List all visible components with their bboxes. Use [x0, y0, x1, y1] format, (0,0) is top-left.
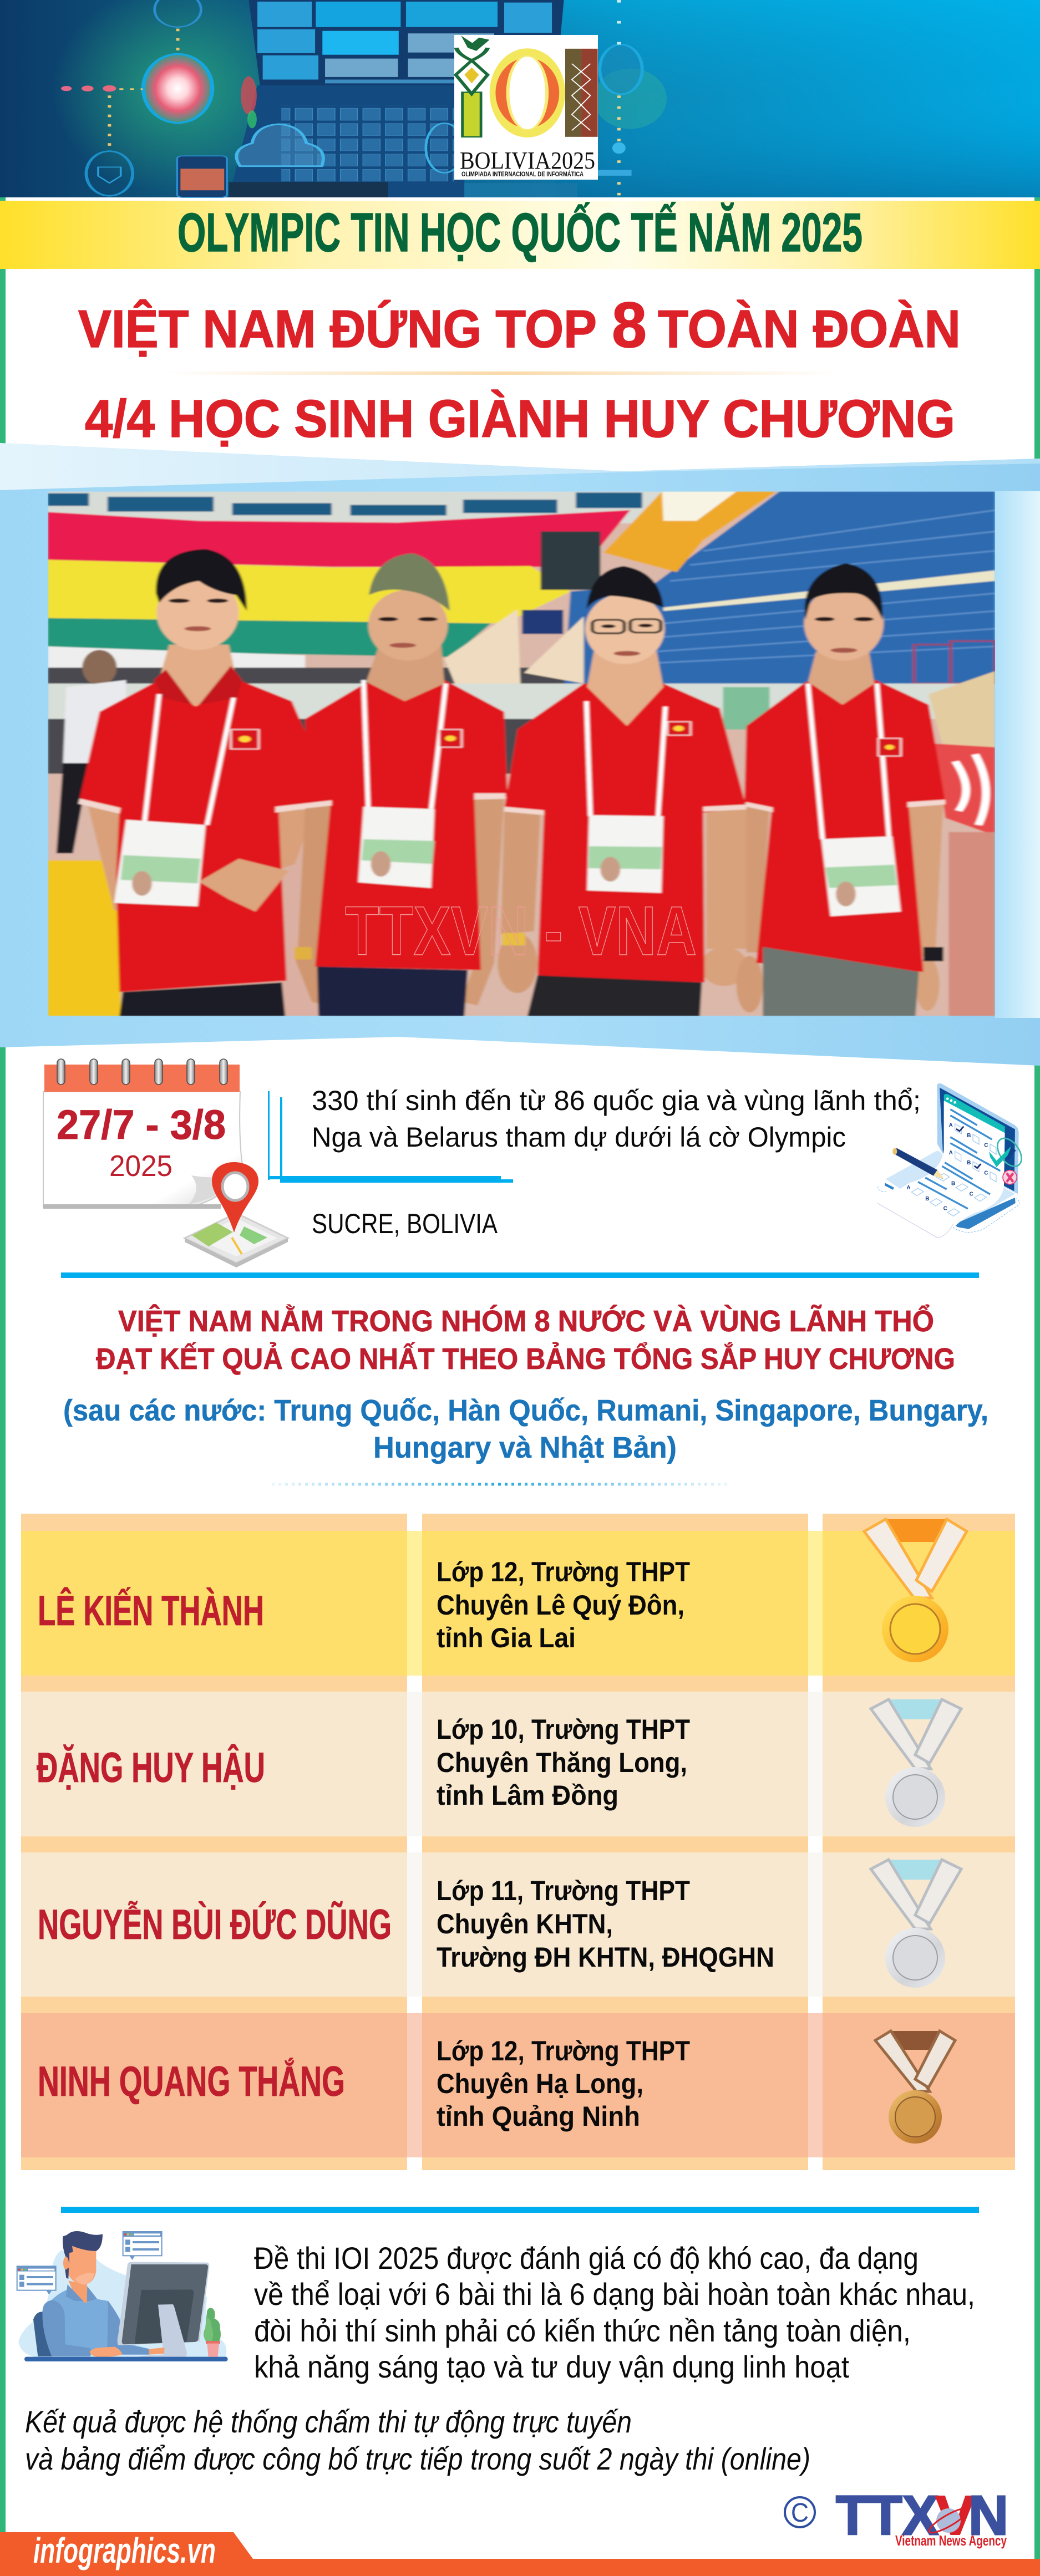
dotted divider [272, 1483, 730, 1486]
icon: online test: C [984, 1143, 988, 1149]
row 4: Ninh Quang Thắng [21, 2013, 1015, 2157]
copyright symbol: C [791, 2498, 809, 2528]
headline line 1: 8 [612, 289, 647, 361]
headline line 1: TOÀN ĐOÀN [658, 299, 961, 359]
location text: SUCRE, BOLIVIA [312, 1208, 498, 1239]
icon: online test: B [925, 1196, 930, 1202]
icon: online test: B [951, 1180, 955, 1187]
headline line 2: 4/4 HỌC SINH GIÀNH HUY CHƯƠNG [85, 389, 955, 449]
photo watermark: TTXVN - VNA [345, 893, 697, 970]
row 2: Đặng Huy Hậu [21, 1692, 1015, 1836]
blue L-shaped accent lines [268, 1091, 513, 1183]
row 2: Đặng Huy Hậu: Lớp 10, Trường THPT [437, 1714, 690, 1745]
student 1 [88, 804, 121, 912]
illustration: man at computer [17, 2231, 228, 2361]
logo: IOI Bolivia 2025: BOLIVIA2025 [460, 147, 595, 174]
footer bar [0, 2532, 1040, 2576]
icon: silver medal 2 [871, 1860, 961, 1988]
row 2: Đặng Huy Hậu: tỉnh Lâm Đồng [437, 1780, 618, 1811]
icon: online test: A [906, 1185, 911, 1191]
logo: IOI Bolivia 2025: OLIMPIADA INTERNACIONAL DE INFORMÁTICA [461, 170, 584, 178]
row 4: Ninh Quang Thắng: Lớp 12, Trường THPT [437, 2035, 690, 2066]
section headline [96, 1304, 955, 1376]
icon: calendar [43, 1059, 244, 1209]
row 1: Lê Kiến Thành: Lớp 12, Trường THPT [437, 1556, 690, 1587]
table column backgrounds [21, 1514, 1015, 2170]
light blue photo band [0, 443, 1040, 1066]
row 2: Đặng Huy Hậu: ĐẶNG HUY HẬU [37, 1744, 265, 1791]
logo: IOI Bolivia 2025 [454, 35, 598, 180]
logo: TTXVN Vietnam News Agency: V [935, 2485, 975, 2547]
headline line 1: VIỆT NAM ĐỨNG TOP [78, 299, 597, 359]
yellow title band [0, 201, 1040, 269]
row 2: Đặng Huy Hậu: Chuyên Thăng Long, [437, 1747, 687, 1778]
logo: TTXVN Vietnam News Agency: TTX [836, 2485, 938, 2547]
exam description text: về thể loại với 6 bài thi là 6 dạng bài hoàn toàn khác nhau, [254, 2277, 975, 2312]
participants text: Nga và Belarus tham dự dưới lá cờ Olympic [312, 1122, 846, 1153]
icon: bronze medal [875, 2031, 955, 2144]
icon: silver medal [871, 1699, 961, 1827]
section subheading: countries: Hungary và Nhật Bản) [373, 1431, 677, 1464]
copyright symbol [785, 2497, 815, 2528]
section headline: VIỆT NAM NẰM TRONG NHÓM 8 NƯỚC VÀ VÙNG LÃNH THỔ [118, 1304, 934, 1338]
header banner: technology illustration [0, 0, 1040, 197]
exam description text: đòi hỏi thí sinh phải có kiến thức nền tảng toàn diện, [254, 2313, 911, 2348]
icon: online test: C [970, 1192, 973, 1198]
row 3: Nguyễn Bùi Đức Dũng: Trường ĐH KHTN, ĐHQGHN [437, 1942, 774, 1973]
year text: 2025 [109, 1149, 173, 1183]
student 2 [297, 804, 332, 961]
student 4 [747, 804, 769, 953]
row 3: Nguyễn Bùi Đức Dũng: Lớp 11, Trường THPT [437, 1875, 690, 1906]
logo: TTXVN Vietnam News Agency: N [968, 2485, 1008, 2547]
section subheading: countries [63, 1394, 988, 1464]
row 1: Lê Kiến Thành: LÊ KIẾN THÀNH [38, 1587, 264, 1635]
row 4: Ninh Quang Thắng: NINH QUANG THẮNG [38, 2058, 345, 2105]
exam description text [254, 2241, 975, 2384]
footer text: infographics.vn [33, 2531, 216, 2570]
row 3: Nguyễn Bùi Đức Dũng [21, 1852, 1015, 1997]
row 3: Nguyễn Bùi Đức Dũng: NGUYỄN BÙI ĐỨC DŨNG [38, 1901, 392, 1948]
participants text: 330 thí sinh đến từ 86 quốc gia và vùng lãnh thổ; [312, 1085, 921, 1116]
italic results note [25, 2404, 810, 2476]
row 4: Ninh Quang Thắng: Chuyên Hạ Long, [437, 2068, 643, 2099]
section subheading: countries: (sau các nước: Trung Quốc, Hàn Quốc, Rumani, Singapore, Bungary, [63, 1394, 988, 1427]
row 1: Lê Kiến Thành [21, 1531, 1015, 1676]
icon: online test: C [984, 1170, 988, 1176]
logo: TTXVN Vietnam News Agency [836, 2485, 1008, 2549]
row 1: Lê Kiến Thành: tỉnh Gia Lai [437, 1622, 576, 1653]
headline line 1 [78, 289, 961, 361]
icon: online test: A [949, 1123, 953, 1129]
team photo: four students in red shirts [48, 491, 995, 1016]
italic results note: và bảng điểm được công bố trực tiếp trong suốt 2 ngày thi (online) [25, 2441, 810, 2476]
participants text [312, 1085, 921, 1153]
seats [564, 491, 995, 687]
icon: online test: A [949, 1150, 953, 1156]
date text: 27/7 - 3/8 [57, 1102, 226, 1148]
row 1: Lê Kiến Thành: Chuyên Lê Quý Đôn, [437, 1590, 684, 1621]
icon: online test: C [943, 1206, 947, 1212]
floor [48, 684, 995, 719]
student 3 [501, 811, 541, 935]
blue divider 2 [61, 2207, 979, 2213]
headline divider [166, 371, 839, 375]
row 4: Ninh Quang Thắng: tỉnh Quảng Ninh [437, 2101, 640, 2132]
icon: online test [877, 1083, 1026, 1238]
icon: online test: B [967, 1133, 971, 1139]
blue divider [61, 1272, 979, 1278]
row 3: Nguyễn Bùi Đức Dũng: Chuyên KHTN, [437, 1908, 613, 1939]
green side border left [0, 197, 6, 2562]
section headline: ĐẠT KẾT QUẢ CAO NHẤT THEO BẢNG TỔNG SẮP HUY CHƯƠNG [96, 1342, 955, 1376]
exam description text: Đề thi IOI 2025 được đánh giá có độ khó cao, đa dạng [254, 2241, 919, 2275]
green side border right [1034, 197, 1040, 2562]
exam description text: khả năng sáng tạo và tư duy vận dụng linh hoạt [254, 2349, 849, 2384]
bystander [82, 650, 116, 685]
italic results note: Kết quả được hệ thống chấm thi tự động trực tuyến [25, 2404, 632, 2439]
roof [48, 491, 671, 523]
icon: online test: B [967, 1160, 971, 1166]
icon: map and location pin [185, 1162, 288, 1267]
icon: gold medal [864, 1519, 967, 1662]
